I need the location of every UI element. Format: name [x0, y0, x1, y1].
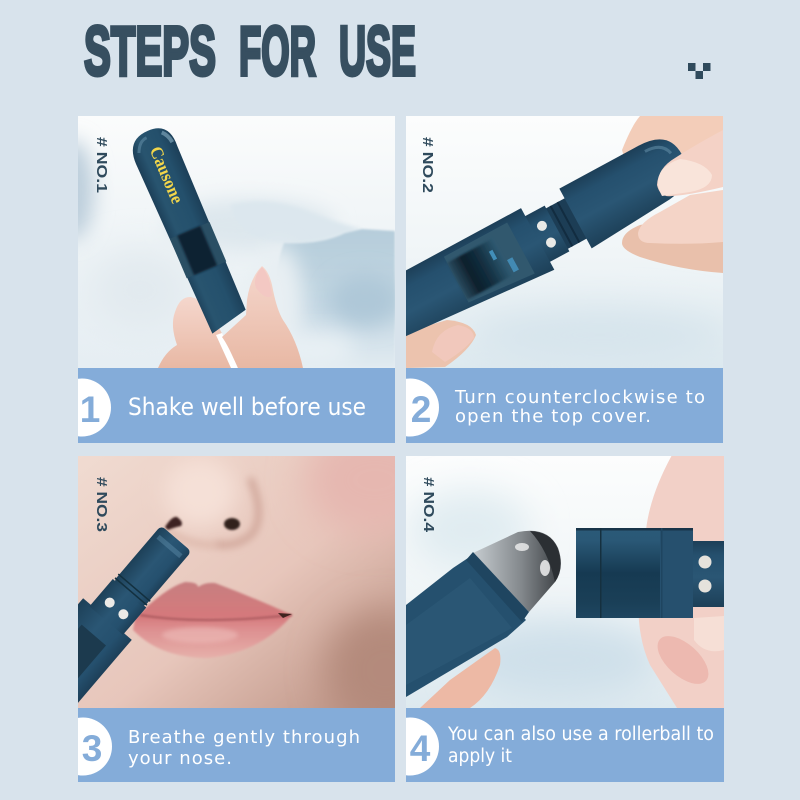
caption text 3 — [128, 727, 360, 769]
panel: step 1 photo — [50, 116, 400, 368]
icon: pen device — [132, 128, 246, 334]
caption text 3: Breathe gently through — [128, 727, 360, 748]
icon: thumb — [406, 320, 476, 368]
title: STEPS — [84, 12, 216, 90]
step label: # NO.4: # NO.4 — [420, 477, 437, 533]
caption text 2: Turn counterclockwise to — [454, 387, 705, 408]
panel: step 3 caption — [54, 708, 395, 782]
icon: nail finger in front of cap — [657, 130, 723, 196]
panel: step 2 caption — [381, 368, 723, 443]
white stripe — [216, 333, 238, 368]
panel: step 2 photo — [406, 116, 723, 368]
icon: open pen device — [406, 139, 682, 336]
caption text 2 — [454, 387, 705, 427]
caption text 4 — [447, 724, 714, 767]
number badge 4: 4 — [410, 728, 431, 769]
brand name: Causone — [146, 143, 188, 206]
icon: pen at nostril — [78, 528, 190, 703]
caption text 3: your nose. — [128, 748, 232, 769]
title: FOR — [239, 12, 316, 90]
icon: rollerball pen — [406, 531, 561, 697]
panel: step 3 photo — [78, 456, 395, 708]
number badge 3: 3 — [82, 728, 102, 769]
icon: pink hand background — [638, 455, 724, 708]
number badge 4 — [406, 718, 439, 776]
step label: # NO.2: # NO.2 — [419, 137, 436, 193]
icon: fingertip — [694, 616, 724, 651]
icon: lower finger — [622, 224, 723, 273]
icon: separated cap — [576, 528, 725, 618]
caption text 2: open the top cover. — [455, 406, 651, 427]
number badge 1: 1 — [80, 389, 100, 430]
title: USE — [339, 12, 416, 90]
lips — [133, 582, 292, 658]
nose — [164, 458, 259, 545]
step label: # NO.3: # NO.3 — [93, 477, 110, 532]
panel: step 4 photo — [406, 455, 725, 708]
step label: # NO.1: # NO.1 — [93, 137, 110, 193]
number badge 2: 2 — [411, 389, 431, 430]
caption text 4: apply it — [448, 746, 512, 767]
panel: step 1 caption — [53, 368, 395, 443]
icon: thumb holding pen — [158, 297, 240, 368]
icon: middle finger — [638, 190, 723, 244]
panel: step 4 caption — [381, 708, 724, 782]
icon: top finger — [622, 116, 723, 154]
number badge 3 — [78, 718, 112, 776]
icon: finger under pen — [420, 648, 500, 708]
number badge 1 — [78, 378, 111, 436]
number badge 2 — [406, 378, 439, 436]
caption text 1: Shake well before use — [128, 393, 366, 421]
icon: three pixel squares — [688, 63, 710, 79]
title — [84, 12, 416, 90]
icon: index finger — [222, 266, 303, 368]
caption text 4: You can also use a rollerball to — [447, 724, 714, 745]
icon: finger nail — [658, 636, 708, 684]
